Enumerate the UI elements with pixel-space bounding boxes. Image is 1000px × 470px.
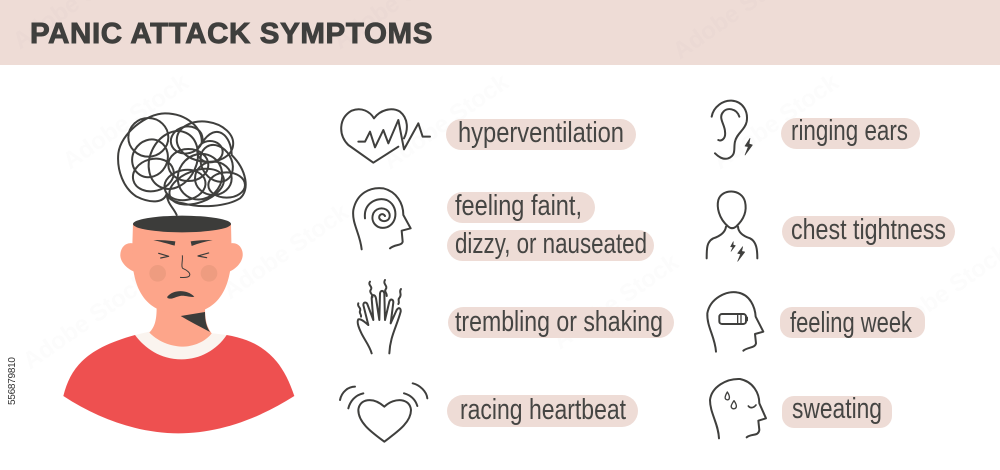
label: trembling or shaking: trembling or shaking xyxy=(455,306,663,338)
infographic: Adobe Stock xyxy=(708,68,844,175)
label: chest tightness: chest tightness xyxy=(791,214,946,246)
right ear xyxy=(227,243,243,273)
collar xyxy=(135,332,227,359)
label: racing heartbeat: racing heartbeat xyxy=(460,394,626,426)
pill: dizzy or nauseated xyxy=(447,230,654,261)
pill: ringing ears xyxy=(781,118,920,149)
nose xyxy=(180,255,190,278)
left cheek xyxy=(149,265,166,282)
infographic: Adobe Stock xyxy=(18,268,154,375)
pill: feeling faint xyxy=(447,192,595,223)
right cheek xyxy=(201,265,217,282)
label: feeling faint: feeling faint, xyxy=(455,190,582,222)
label: feeling week: feeling week xyxy=(790,307,912,339)
infographic: Adobe Stock xyxy=(378,68,514,175)
icon: sweating head xyxy=(710,379,766,438)
infographic: Adobe Stock xyxy=(58,68,194,175)
icon: ringing ear xyxy=(712,101,752,159)
infographic: Adobe Stock xyxy=(218,198,354,305)
label: hyperventilation: hyperventilation xyxy=(458,117,624,149)
stock image number: 556879810 xyxy=(7,357,18,405)
header band xyxy=(0,0,1000,65)
icon: trembling hand xyxy=(358,280,401,353)
icon: head with low battery xyxy=(707,292,763,352)
tangled scribble xyxy=(118,113,246,215)
pill: chest tightness xyxy=(782,216,955,247)
label: dizzy or nauseated: dizzy, or nauseated xyxy=(455,228,647,260)
icon: chest tightness xyxy=(707,191,757,261)
right eyebrow xyxy=(191,240,213,246)
neck xyxy=(149,307,212,347)
mouth xyxy=(167,291,194,299)
label: sweating: sweating xyxy=(792,393,882,425)
title: PANIC ATTACK SYMPTOMS xyxy=(30,18,433,50)
pill: sweating xyxy=(782,396,892,428)
illustration: stressed person with tangled thoughts xyxy=(63,113,294,433)
pill: feeling week xyxy=(780,307,925,338)
shirt xyxy=(63,335,294,433)
infographic: Adobe Stock xyxy=(548,248,684,355)
left eyebrow xyxy=(153,240,175,246)
eyes xyxy=(159,253,209,258)
pill: trembling or shaking xyxy=(448,307,674,338)
icon: heart with pulse xyxy=(341,109,430,163)
open skull xyxy=(133,216,231,232)
label: ringing ears: ringing ears xyxy=(791,115,908,147)
left ear xyxy=(120,243,137,273)
pill: hyperventilation xyxy=(446,119,636,150)
icon: racing heart xyxy=(340,383,427,442)
head xyxy=(132,223,232,314)
icon: head with spiral xyxy=(353,188,411,249)
pill: racing heartbeat xyxy=(447,395,638,427)
neck shadow xyxy=(181,312,210,332)
